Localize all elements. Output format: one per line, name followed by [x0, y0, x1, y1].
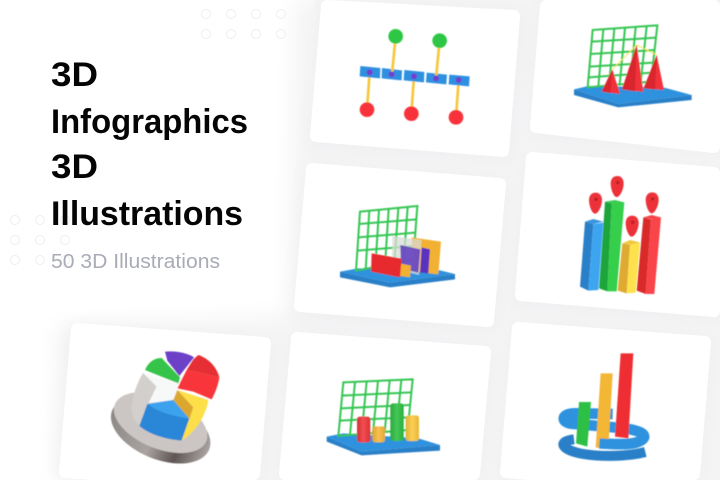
card: bar chart with pins [521, 158, 714, 311]
icon: bars through spiral [563, 353, 645, 456]
card: timeline [316, 6, 514, 151]
title: Illustrations [51, 195, 243, 233]
icon: cones on grid [574, 25, 692, 107]
title: Infographics [51, 103, 248, 141]
card: spiral bar chart [506, 328, 705, 474]
card: block chart [300, 169, 500, 321]
icon: exploded pie chart on ring [101, 351, 220, 477]
decorative dots: left [10, 216, 70, 264]
icon: cylinders on grid [327, 379, 440, 455]
title: 3D [51, 148, 98, 186]
decorative dots: top [202, 10, 286, 38]
card: pie chart [65, 329, 265, 477]
subtitle: 50 3D Illustrations [51, 251, 220, 273]
icon: blocks on grid [340, 206, 455, 287]
card: cone chart [536, 6, 714, 147]
title: 3D [51, 56, 98, 94]
icon: timeline with pins [360, 29, 470, 125]
card: cylinder chart [285, 338, 485, 474]
title [51, 56, 248, 233]
icon: bars with map pins [580, 176, 662, 294]
